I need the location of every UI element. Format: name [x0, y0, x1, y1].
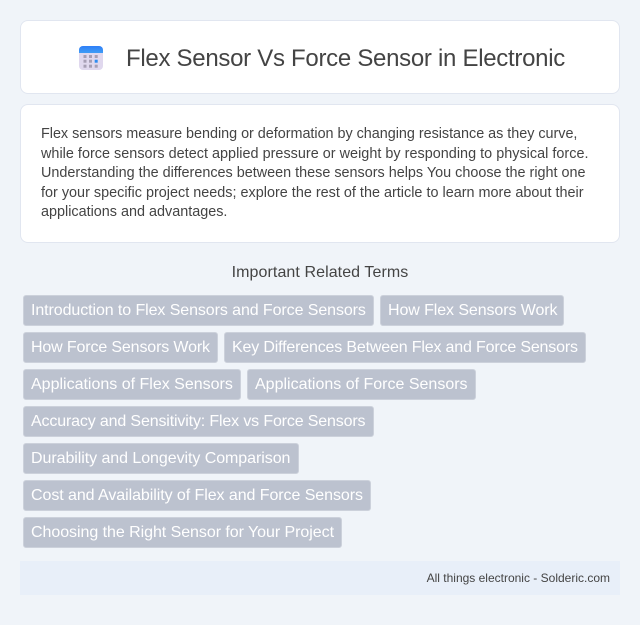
- footer bar: [20, 561, 620, 595]
- tag: [23, 480, 371, 511]
- tag: Choosing the Right Sensor for Your Project: [31, 524, 334, 541]
- intro text panel: [20, 104, 620, 243]
- tag: Accuracy and Sensitivity: Flex vs Force Sensors: [31, 413, 365, 430]
- tag: How Flex Sensors Work: [388, 302, 557, 319]
- intro paragraph: [41, 126, 589, 220]
- footer text: All things electronic - Solderic.com: [427, 571, 610, 585]
- tag: Key Differences Between Flex and Force Sensors: [232, 339, 578, 356]
- tag: [23, 369, 241, 400]
- related terms tags: [23, 295, 586, 548]
- tag: [23, 406, 374, 437]
- intro paragraph: for your specific project needs; explore the rest of the article to learn more about their: [41, 185, 584, 201]
- intro paragraph: Understanding the differences between these sensors helps You choose the right one: [41, 165, 586, 181]
- icon: calendar: [79, 46, 103, 70]
- tag: [23, 295, 374, 326]
- title: Flex Sensor Vs Force Sensor in Electronic: [126, 45, 565, 72]
- tag: [23, 517, 342, 548]
- tag: [380, 295, 564, 326]
- tag: [23, 443, 299, 474]
- tag: [247, 369, 476, 400]
- tag: Durability and Longevity Comparison: [31, 450, 290, 467]
- tag: Applications of Flex Sensors: [31, 376, 233, 393]
- header panel: [20, 20, 620, 94]
- tag: Cost and Availability of Flex and Force Sensors: [31, 487, 363, 504]
- tag: [23, 332, 218, 363]
- intro paragraph: while force sensors detect applied pressure or weight by responding to physical force.: [41, 146, 589, 162]
- intro paragraph: applications and advantages.: [41, 204, 227, 220]
- tag: Applications of Force Sensors: [255, 376, 468, 393]
- section heading: Important Related Terms: [232, 264, 408, 281]
- intro paragraph: Flex sensors measure bending or deformation by changing resistance as they curve,: [41, 126, 577, 142]
- tag: How Force Sensors Work: [31, 339, 210, 356]
- tag: [224, 332, 586, 363]
- tag: Introduction to Flex Sensors and Force Sensors: [31, 302, 366, 319]
